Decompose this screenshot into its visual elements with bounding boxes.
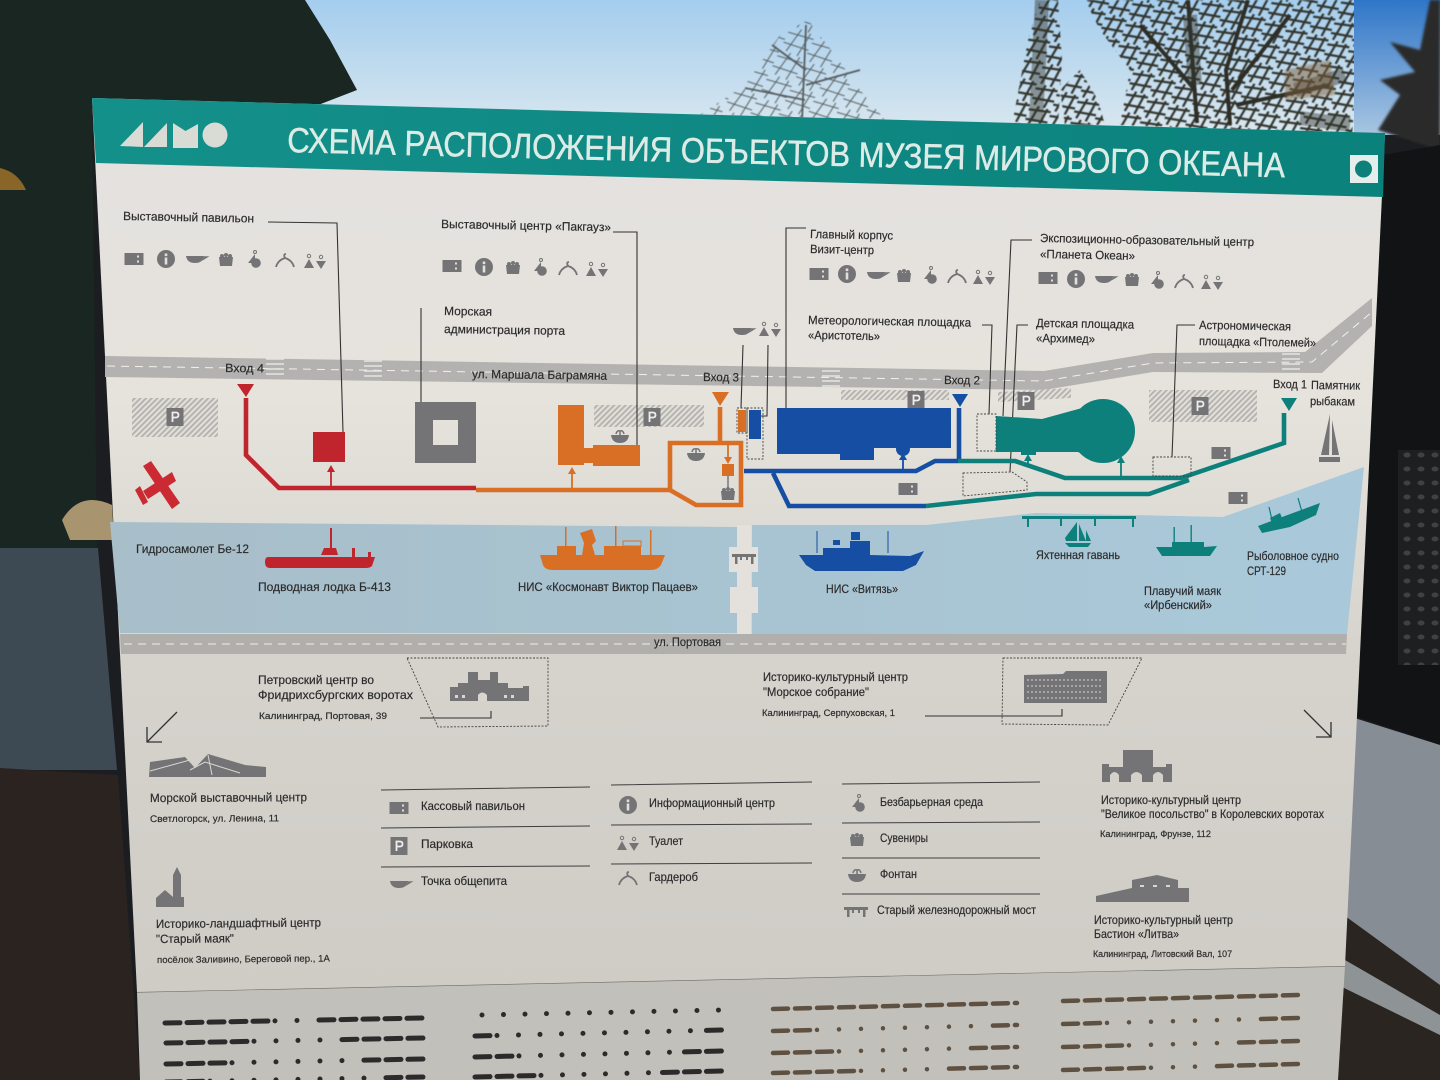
map labels, upper: Вход 1 [1273,377,1307,391]
header band [92,98,1385,197]
map labels, upper: Экспозиционно-образовательный центр [1040,231,1254,249]
ship: submarine B-413 [265,528,375,568]
map labels, water: НИС «Космонавт Виктор Пацаев» [518,580,698,594]
branch labels, upper row: "Морское собрание" [763,685,869,699]
facility icons: main building [810,265,995,285]
logo mark [120,122,228,148]
legend labels: Безбарьерная среда [880,795,983,809]
branch labels, upper row: Калининград, Серпуховская, 1 [762,708,895,719]
map labels, upper: «Аристотель» [808,328,880,343]
map labels, upper: Метеорологическая площадка [808,313,971,330]
legend divider lines [381,782,1040,894]
legend labels: Туалет [649,834,683,848]
branch labels, lower right [1093,793,1324,960]
parking areas [132,388,1257,437]
grey building [415,402,476,463]
map labels, upper: «Планета Океан» [1040,247,1135,263]
branch labels, upper row: Калининград, Портовая, 39 [259,711,387,722]
branch labels, lower right: Историко-культурный центр [1094,913,1233,927]
legend labels: Парковка [421,837,473,851]
icon: yacht [1065,522,1091,547]
branch labels, lower right: "Великое посольство" в Королевских воротах [1101,807,1324,821]
bare tree behind sign [700,20,885,122]
cash pavilions on map [898,447,1248,504]
facility icons: meteo site [733,322,781,337]
orange exhibit group: warehouse and route [476,392,747,505]
map labels, upper: рыбакам [1310,394,1355,409]
red exhibit group: pavilion, route and plane [135,384,476,509]
map labels, upper: администрация порта [444,322,565,338]
legend labels: Точка общепита [421,874,507,888]
blue exhibit group: main building and routes [744,394,968,506]
branch labels, lower right: Калининград, Литовский Вал, 107 [1093,949,1232,960]
map labels, upper: ул. Маршала Баграмяна [472,367,607,383]
left tree and ground [0,0,357,550]
map labels, water: Яхтенная гавань [1036,548,1120,562]
icon: royal gate [1102,750,1172,782]
branch labels, lower left: "Старый маяк" [156,931,234,946]
main map sign panel [92,98,1385,992]
facility icons: Planet Ocean [1038,270,1223,290]
icon: old lighthouse [156,867,184,907]
facility icons: Pakgauz [442,258,608,277]
road: ул. Портовая [120,634,1347,654]
map labels, water: Гидросамолет Бе-12 [136,542,249,556]
branch labels, upper row: Историко-культурный центр [763,670,908,684]
map labels, upper [123,209,1361,409]
legend labels: Гардероб [649,870,698,884]
leader lines [268,222,1195,718]
legend icons [390,794,868,917]
map labels, upper: Главный корпус [810,227,893,243]
map labels, water: Плавучий маяк [1144,584,1222,598]
branch labels, lower left: Морской выставочный центр [150,790,307,805]
map labels, upper: Вход 4 [225,361,264,375]
branch labels, upper row [258,670,908,722]
facility icons: exhibition pavilion [124,250,326,269]
lower perforated sign panel [137,966,1345,1080]
map labels, upper: площадка «Птолемей» [1199,334,1316,350]
ship: Vityaz [799,531,924,571]
icon: fisherman monument sail [1319,414,1340,462]
corner mark [1350,155,1378,183]
icon: marine exhibition centre [149,754,266,777]
map labels, water: «Ирбенский» [1144,598,1212,612]
icon: yacht harbour pier [1022,516,1136,527]
ship: fishing vessel SRT-129 [1258,498,1320,533]
map labels, water [136,542,1339,649]
map labels, upper: Астрономическая [1199,318,1291,333]
branch labels, upper row: Петровский центр во [258,673,374,687]
poplars and large tree [1012,0,1358,135]
map labels, water: СРТ-129 [1247,564,1286,578]
branch: Petrovsky centre [407,658,548,727]
branch labels, lower left [150,790,331,966]
map labels, upper: Выставочный центр «Пакгауз» [441,217,612,234]
branch labels, lower right: Калининград, Фрунзе, 112 [1100,829,1211,840]
pier and bridge pads [729,525,758,635]
reflective building [1354,0,1440,135]
icon: old railway bridge [732,554,756,564]
branch labels, lower left: Историко-ландшафтный центр [156,916,321,931]
branch labels, lower right: Бастион «Литва» [1094,927,1179,941]
map labels, water: Подводная лодка Б-413 [258,580,391,594]
legend labels: Информационный центр [649,796,775,810]
arrow: south-east [1304,710,1331,737]
legend labels: Сувениры [880,831,928,845]
map labels, upper: Визит-центр [810,242,874,257]
legend labels: Старый железнодорожный мост [877,903,1036,917]
legend labels: Фонтан [880,867,917,881]
map labels, upper: Детская площадка [1036,316,1134,332]
map labels, water: Рыболовное судно [1247,549,1339,563]
ship: Kosmonavt Viktor Patsaev [540,526,665,570]
icon: bastion Litva [1096,875,1189,902]
road: ул. Маршала Баграмяна [105,298,1372,390]
branch labels, lower left: Светлогорск, ул. Ленина, 11 [150,813,279,825]
icon: seaplane [135,461,180,509]
branch labels, upper row: Фридрихсбургских воротах [258,688,413,702]
map labels, upper: Вход 2 [944,373,980,387]
ship: Irbensky lightship [1156,525,1217,556]
legend labels [421,795,1036,917]
branch labels, lower left: посёлок Заливино, Береговой пер., 1А [157,953,331,966]
map labels, upper: Вход 3 [703,370,739,384]
map labels, water: НИС «Витязь» [826,582,898,596]
branch labels, lower right: Историко-культурный центр [1101,793,1241,807]
legend labels: Кассовый павильон [421,799,525,813]
title: СХЕМА РАСПОЛОЖЕНИЯ ОБЪЕКТОВ МУЗЕЯ МИРОВОГО ОКЕАНА [287,121,1286,185]
map labels, upper: Выставочный павильон [123,209,254,226]
water area [110,467,1364,634]
branch: Morskoe sobranie [1002,658,1142,725]
map labels, upper: Морская [444,304,492,319]
map labels, water: ул. Портовая [654,635,721,649]
map labels, upper: «Архимед» [1036,331,1095,346]
arrow: south-west [147,712,177,742]
map labels, upper: Памятник [1311,378,1361,393]
teal exhibit group: Planet Ocean and routes [926,398,1297,547]
